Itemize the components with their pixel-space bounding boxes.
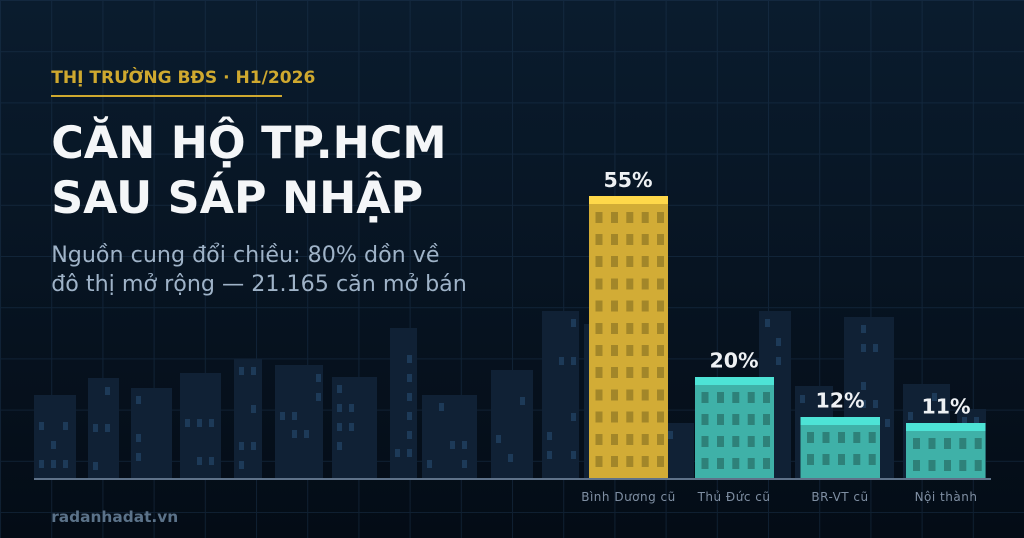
bar: BR-VT cũ 12% (800, 417, 880, 478)
subtitle: đô thị mở rộng — 21.165 căn mở bán (51, 271, 467, 297)
label: Thủ Đức cũ: Thủ Đức cũ (697, 490, 770, 504)
kicker rule (51, 95, 282, 97)
skyline silhouette (34, 311, 986, 479)
label: BR-VT cũ: BR-VT cũ (811, 490, 869, 504)
value: 20%: 20% (709, 348, 759, 372)
value: 55%: 55% (603, 168, 653, 192)
label: Bình Dương cũ: Bình Dương cũ (581, 490, 676, 504)
source: radanhadat.vn (51, 508, 178, 526)
subtitle: Nguồn cung đổi chiều: 80% dồn về (51, 242, 440, 268)
bar: Nội thành 11% (906, 423, 986, 478)
label: Nội thành: Nội thành (915, 490, 977, 504)
kicker: THỊ TRƯỜNG BĐS · H1/2026 (51, 66, 315, 88)
bar: Thủ Đức cũ 20% (695, 377, 774, 478)
title: SAU SÁP NHẬP (51, 171, 423, 224)
chart baseline (34, 478, 991, 480)
value: 11%: 11% (921, 394, 971, 418)
title: CĂN HỘ TP.HCM (51, 116, 447, 169)
value: 12%: 12% (815, 388, 865, 412)
bar: Bình Dương cũ 55% (589, 196, 668, 478)
